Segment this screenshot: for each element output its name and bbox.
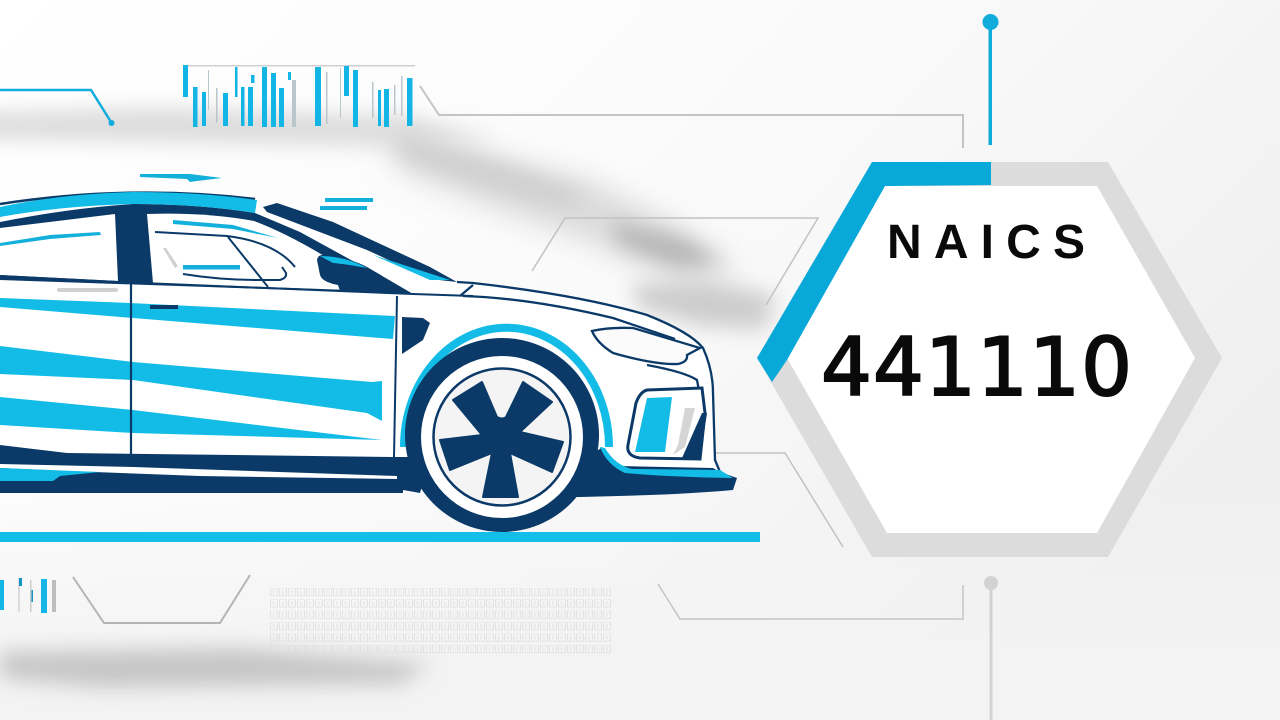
hexagon gray frame: [757, 162, 1222, 557]
ground line: [0, 532, 760, 542]
roof outline: [0, 193, 255, 204]
circuit line: bottom gray bracket: [658, 584, 963, 619]
tire: [405, 338, 599, 532]
rear window: [0, 214, 118, 281]
circuit line: bottom-left bracket: [73, 575, 250, 623]
bumper cyan strip: [600, 447, 733, 478]
spokes: [440, 382, 563, 497]
circuit line: gray connector below car nose: [715, 453, 843, 547]
hexagon blue accent: [757, 162, 991, 382]
door handle: [150, 305, 178, 309]
barcode: top: [183, 65, 415, 127]
wheel: [405, 338, 599, 532]
node line: bottom gray: [984, 576, 998, 720]
front bumper: [540, 447, 737, 497]
hood lines: [457, 282, 720, 472]
smoke trail: diagonal swoosh: [380, 128, 775, 330]
belt line and door lines: [0, 276, 473, 457]
stripe: middle: [0, 346, 382, 421]
hexagon badge: [757, 162, 1222, 557]
circuit line: top-left cyan connector: [0, 90, 114, 126]
windshield cyan sliver: [373, 255, 450, 280]
car illustration: [0, 174, 737, 532]
mirror highlight: [320, 256, 367, 268]
greenhouse frame: [0, 204, 413, 294]
circuit line: mid gray bracket: [532, 218, 818, 305]
roof cyan highlight: [0, 192, 257, 217]
grille: [628, 388, 707, 459]
dashboard lines: [155, 232, 295, 287]
front window: [147, 214, 378, 291]
hexagon white fill: [787, 186, 1195, 533]
circuit line: top gray connector: [420, 86, 963, 148]
smoke trail: top band: [0, 108, 500, 146]
sill and lower body: [0, 445, 430, 493]
code 441110: 441110: [821, 321, 1132, 414]
node line: top cyan: [982, 14, 998, 145]
front door vent: [402, 317, 430, 354]
window gray marks: [57, 248, 178, 292]
rim white: [421, 356, 583, 518]
data grid pattern: [270, 588, 612, 654]
rim ring: [434, 368, 570, 506]
window cyan accents: [0, 220, 278, 270]
label NAICS: NAICS: [887, 216, 1085, 269]
stripe: lower: [0, 397, 382, 440]
car body fill: [0, 193, 737, 497]
sill cyan accent: [0, 468, 100, 481]
barcode: bottom-left: [0, 578, 56, 613]
wheel arch cyan: [404, 328, 609, 447]
headlight: [592, 328, 700, 364]
upper dark windshield band: [263, 203, 457, 282]
smoke trail: bottom band: [0, 648, 430, 688]
speed lines: [140, 174, 373, 210]
side mirror: [317, 255, 413, 294]
sill white slit: [0, 464, 397, 479]
stripe: upper: [0, 298, 395, 339]
